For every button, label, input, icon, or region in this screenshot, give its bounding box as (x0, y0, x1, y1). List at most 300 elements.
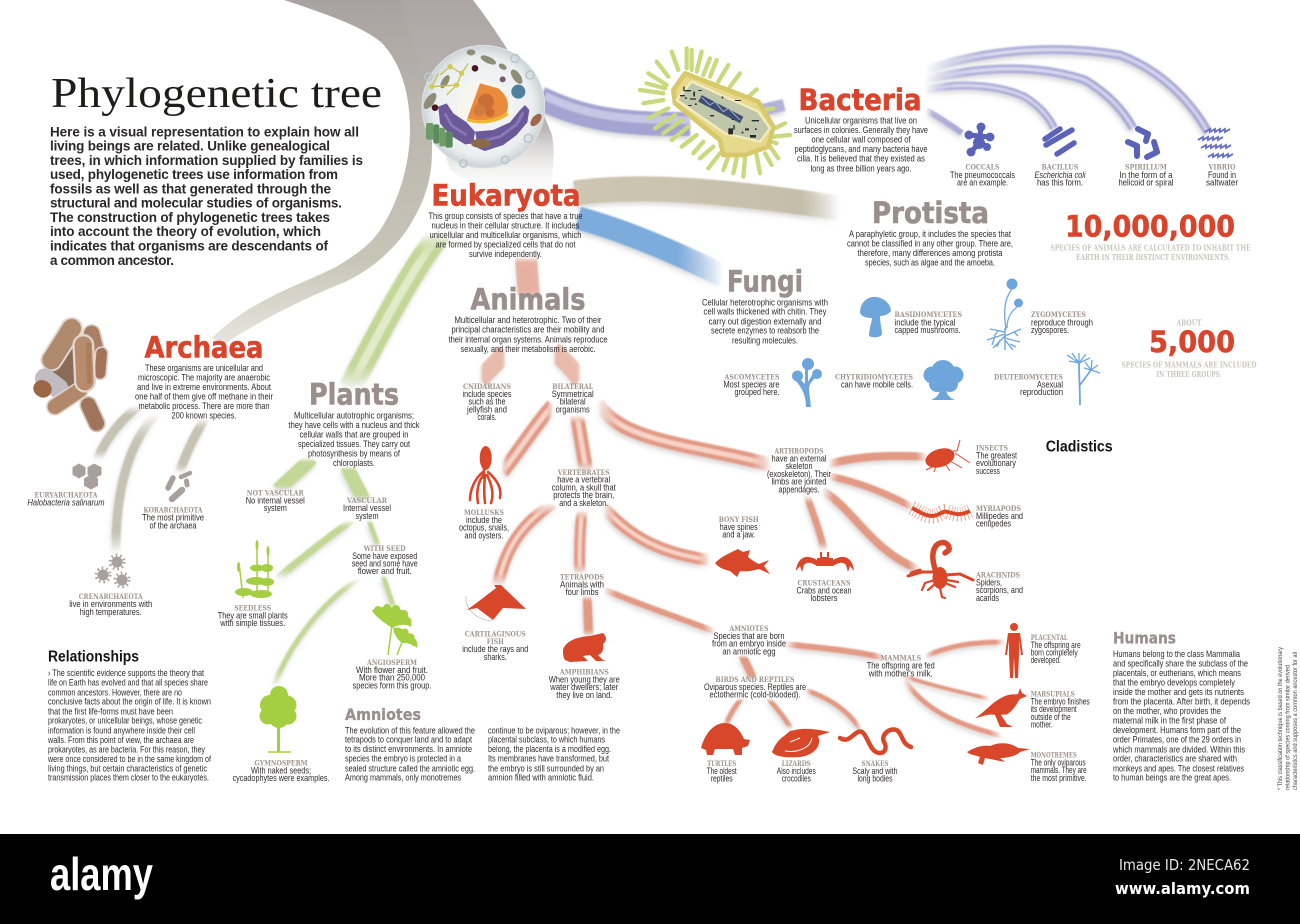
icon: seedless plant (235, 540, 274, 598)
fungi types: BASIDIOMYCETES (894, 310, 962, 319)
animal group labels: include the (466, 515, 502, 525)
animal group labels: LIZARDS (782, 759, 811, 768)
panel: relationships: living things, but certain characteristics of genetic (48, 763, 207, 774)
animal group labels: VERTEBRATES (557, 468, 610, 477)
icon: turtle (701, 723, 750, 755)
bacteria types: The pneumococcals (950, 170, 1015, 180)
animal group labels: (exoskeleton). Their (767, 469, 831, 479)
panel: plants: GYMNOSPERM (254, 758, 308, 768)
icon: euryarchaeota hexagons (72, 464, 102, 490)
panel: amniotes: the embryo is still surrounded by an (488, 763, 604, 774)
animal group labels: such as the (468, 397, 506, 407)
fungi types: Most species are (724, 380, 780, 390)
icon: deuteromycetes (1067, 353, 1100, 405)
icon: crocodile (772, 729, 830, 757)
footnote (1278, 647, 1299, 790)
footer image id (1115, 856, 1250, 898)
panel: humans: from the placenta. After birth, it depends (1113, 697, 1250, 708)
animal group labels: ectothermic (cold-blooded). (710, 690, 800, 700)
animal group labels: appendages. (778, 484, 820, 494)
bacteria types: Escherichia coli (1034, 170, 1086, 180)
panel: relationships: prokaryotes, as are bacteria. For this reason, they (48, 744, 205, 755)
bacteria types: BACILLUS (1042, 162, 1079, 172)
icon: spirillum (1128, 129, 1157, 157)
stat: five thousand mammal species (1122, 318, 1256, 379)
panel: bacteria: Unicellular organisms that live on (805, 116, 917, 127)
footnote: * This classification technique is based on the evolutionary (1278, 647, 1284, 790)
panel: bacteria (794, 83, 928, 174)
animal group labels: Crabs and ocean (796, 586, 852, 596)
animal group labels: success (976, 466, 1000, 476)
intro text: used, phylogenetic trees use information from (50, 167, 338, 182)
animal group labels: BONY FISH (719, 515, 759, 524)
branches: plants (274, 232, 441, 686)
panel: archaea: KORARCHAEOTA (144, 506, 203, 514)
animal group labels: MYRIAPODS (976, 504, 1021, 513)
icon: angiosperm (372, 604, 417, 655)
panel: amniotes: placental subclass, to which humans (488, 735, 605, 746)
panel: plants: cellular walls that are grouped in (300, 430, 408, 441)
panel: fungi: carry out digestion externally and (708, 316, 822, 327)
bacteria types: VIBRIO (1208, 162, 1236, 172)
panel: relationships: that the first life-forms must have been (48, 706, 173, 717)
animal group labels: BILATERAL (552, 382, 594, 391)
fungi types: grouped here. (734, 387, 780, 397)
panel: archaea: one half of them give off methane in their (135, 392, 274, 403)
animal group labels: column, a skull that (552, 482, 616, 492)
panel: archaea: 200 known species. (172, 410, 236, 421)
panel: amniotes: amnion filled with amniotic fluid. (488, 773, 594, 784)
animal group labels: FISH (487, 637, 504, 646)
panel: plants: they have cells with a nucleus and thick (288, 420, 420, 431)
icon: manta ray (466, 585, 526, 621)
bacteria types (950, 122, 1238, 188)
animal group labels: CNIDARIANS (463, 382, 511, 391)
icon: frog (563, 633, 606, 662)
animal group labels: crocodiles (782, 774, 811, 784)
intro text: living beings are related. Unlike genealogical (50, 139, 330, 154)
panel: plants: WITH SEED (363, 544, 406, 553)
panel: archaea: high temperatures. (80, 607, 142, 617)
panel: eukaryota: are formed by specialized cells that do not (436, 239, 576, 250)
animal group labels (459, 382, 1090, 784)
animal group labels: CRUSTACEANS (798, 578, 851, 588)
branches: animals (480, 256, 1005, 736)
illustration: archaea cells (42, 328, 102, 423)
panel: plants: flower and fruit. (358, 566, 412, 576)
icon: platypus (967, 743, 1030, 765)
animal group labels: the most primitive. (1031, 773, 1087, 783)
panel: protista: therefore, many differences among protista (858, 248, 1003, 259)
animal group labels: mother. (1031, 720, 1053, 730)
animal group labels: Also includes (777, 766, 816, 776)
panel: plants: With flower and fruit. (356, 665, 428, 675)
panel: plants: No internal vessel (246, 496, 305, 506)
icon: bony fish (715, 549, 770, 577)
panel: plants: photosynthesis by means of (308, 449, 400, 460)
stat: ten million animal species: EARTH IN THEIR DISTINCT ENVIRONMENTS. (1076, 252, 1230, 262)
panel: plants: system (264, 503, 287, 513)
icon: korarchaeota (168, 473, 190, 499)
panel: amniotes: continue to be oviparous; however, in the (488, 725, 620, 736)
animal group labels: its development (1031, 704, 1077, 714)
title: Phylogenetic tree (51, 71, 382, 117)
intro text (50, 124, 363, 268)
panel: fungi: Fungi (727, 265, 803, 299)
animal group labels: The only oviparous (1031, 758, 1086, 768)
panel: fungi: secrete enzymes to reabsorb the (711, 326, 819, 337)
animal group labels: SNAKES (862, 759, 889, 768)
panel: archaea: and live in extreme environments. About (137, 382, 271, 393)
animal group labels: lobsters (810, 593, 838, 603)
panel: relationships: walls. From this point of view, the archaea are (47, 735, 194, 746)
panel: archaea: of the archaea (150, 520, 197, 530)
fungi types: include the typical (894, 318, 956, 328)
animal group labels: protects the brain, (553, 490, 614, 500)
bacteria types: helicoid or spiral (1118, 178, 1174, 188)
branches: bacteria (540, 50, 1208, 133)
fungi types: zygospores. (1031, 325, 1069, 335)
panel: plants: More than 250,000 (359, 672, 425, 682)
panel: plants: system (356, 511, 378, 521)
animal group labels: AMPHIBIANS (559, 668, 609, 676)
animal group labels: Animals with (560, 580, 604, 590)
icon: mushroom (860, 297, 891, 337)
panel: plants: VASCULAR (346, 496, 387, 505)
panel: plants (218, 377, 432, 783)
panel: plants: specialized tissues. They carry out (298, 439, 410, 450)
footer bar (0, 834, 1300, 924)
fungi types: reproduction (1020, 387, 1063, 397)
panel: amniotes: The evolution of this feature allowed the (345, 725, 475, 736)
panel: humans: and specifically share the subclass of the (1113, 659, 1248, 670)
panel: humans: to human beings are the great apes. (1113, 773, 1231, 784)
animal group labels: jellyfish and (466, 404, 507, 414)
animal group labels: The offspring are (1031, 640, 1081, 650)
animal group labels: four limbs (566, 587, 599, 597)
bacteria types: In the form of a (1120, 170, 1173, 180)
animal group labels: corals. (478, 412, 496, 422)
animal group labels: The greatest (976, 450, 1017, 460)
panel: archaea: CRENARCHAEOTA (79, 592, 143, 601)
footnote: characteristics and supposes a common ancestor for all (1293, 652, 1299, 790)
fungi types: DEUTEROMYCETES (994, 372, 1063, 382)
panel: plants: Plants (309, 377, 399, 411)
icon: gymnosperm tree (260, 686, 296, 752)
animal group labels: ARACHNIDS (975, 570, 1020, 580)
panel: plants: SEEDLESS (234, 604, 271, 612)
animal group labels: AMNIOTES (729, 624, 769, 633)
panel: plants: They are small plants (218, 610, 288, 620)
icon: human (1005, 623, 1023, 678)
panel: amniotes: Amniotes (345, 705, 421, 724)
animal group labels: INSECTS (976, 444, 1008, 452)
panel: bacteria: one cellular wall composed of (812, 135, 911, 146)
animal group labels: and a jaw. (722, 530, 755, 540)
fungi types: ZYGOMYCETES (1031, 310, 1086, 319)
panel: humans: development. Humans form part of the (1113, 725, 1241, 736)
panel: plants: With naked seeds; (251, 766, 311, 776)
panel: bacteria: surfaces in colonies. Generally they have (794, 125, 928, 136)
animal group labels: and oysters. (464, 530, 504, 540)
animal group labels: limbs are jointed (772, 476, 826, 486)
bacteria types: has this form. (1037, 178, 1083, 188)
panel: humans (1112, 628, 1250, 784)
icon: bacillus (1045, 129, 1074, 154)
panel: archaea: The most primitive (142, 512, 204, 522)
footnote: relationship of species coming from similar derived (1286, 665, 1292, 790)
panel: humans: that the embryo develops completely (1113, 678, 1235, 689)
animal group labels: Oviparous species. Reptiles are (704, 682, 806, 692)
animal group labels: Millipedes and (976, 511, 1023, 521)
panel: plants: species form this group. (352, 680, 432, 690)
animal group labels: from an embryo inside (712, 638, 786, 648)
animal silhouettes (466, 440, 1030, 765)
panel: humans: on the mother, who provides the (1113, 706, 1221, 717)
intro text: The construction of phylogenetic trees takes (50, 210, 330, 225)
panel: protista (847, 196, 1013, 268)
animal group labels: TURTLES (707, 759, 736, 768)
animal group labels: PLACENTAL (1031, 633, 1068, 642)
panel: eukaryota: This group consists of species that have a true (428, 211, 582, 222)
panel: humans: Humans belong to the class Mammalia (1113, 649, 1241, 660)
panel: archaea: metabolic process. There are more than (138, 401, 270, 412)
animal group labels: ARTHROPODS (774, 446, 824, 456)
fungi types: Asexual (1037, 380, 1063, 390)
panel: plants: Internal vessel (343, 503, 391, 513)
panel: humans: Humans (1113, 628, 1176, 647)
panel: amniotes: tetrapods to conquer land and to adapt (345, 735, 472, 746)
footer logo: alamy (50, 848, 153, 900)
animal group labels: octopus, snails, (459, 523, 509, 533)
panel: relationships: common ancestors. However, there are no (48, 687, 182, 698)
icon: chytridiomycetes (924, 360, 964, 400)
panel: humans: which mammals are divided. Within this (1112, 744, 1245, 755)
animal group labels: MARSUPIALS (1031, 690, 1075, 698)
icon: myriapod (912, 508, 970, 516)
branches: archaea (98, 405, 205, 552)
intro text: into account the theory of evolution, which (50, 224, 321, 239)
panel: protista: cannot be classified in any other group. There are, (847, 238, 1013, 250)
icon: ascomycetes (792, 358, 822, 407)
panel: animals heading: Multicellular and heterotrophic. Two of their (454, 315, 602, 326)
fungi types: can have mobile cells. (841, 380, 913, 390)
icon: beetle (923, 440, 970, 472)
panel: relationships: prokaryotes, or unicellular beings, whose genetic (48, 716, 202, 727)
phylogenetic tree trunk (212, 0, 554, 345)
fungi types: CHYTRIDIOMYCETES (835, 372, 913, 382)
fungi types: reproduce through (1031, 318, 1093, 328)
panel: eukaryota: Eukaryota (432, 179, 580, 213)
panel: amniotes (345, 705, 620, 784)
footer image id: Image ID: 2NECA62 (1119, 856, 1250, 874)
panel: relationships: › The scientific evidence supports the theory that (48, 668, 204, 679)
animal group labels: skeleton (786, 461, 812, 471)
panel: plants: cycadophytes were examples. (232, 773, 330, 783)
icon: octopus (470, 446, 500, 503)
animal group labels: acarids (976, 593, 999, 603)
panel: eukaryota: unicellular and multicellular organisms, which (430, 230, 582, 241)
icon: coccals (964, 122, 994, 156)
intro text: Here is a visual representation to explain how all (50, 124, 359, 140)
panel: plants: Some have exposed (352, 551, 417, 561)
animal group labels: evolutionary (976, 458, 1016, 468)
animal group labels: mammals. They are (1031, 765, 1087, 775)
panel: fungi: cell walls thickened with chitin. They (704, 307, 827, 318)
panel: animals heading: their internal organ systems. Animals reproduce (448, 334, 608, 345)
panel: protista: A paraphyletic group, it includes the species that (849, 229, 1011, 240)
panel: bacteria: Bacteria (798, 83, 922, 117)
animal group labels: organisms (556, 404, 590, 414)
animal group labels: Spiders, (976, 578, 1002, 588)
animal group labels: bilateral (560, 397, 586, 407)
panel: humans: monkeys and apes. The closest relatives (1113, 763, 1244, 774)
animal group labels: MOLLUSKS (464, 508, 504, 517)
icon: zygomycetes (987, 278, 1023, 350)
panel: amniotes: Among mammals, only monotremes (345, 773, 461, 784)
animal group labels: The offspring are fed (867, 660, 935, 670)
animal group labels: CARTILAGINOUS (465, 630, 526, 638)
panel: plants: with simple tissues. (219, 618, 285, 628)
panel: plants: NOT VASCULAR (247, 488, 304, 498)
animal group labels: Species that are born (714, 631, 784, 641)
icon: snake (840, 729, 911, 753)
panel: plants: seed and some have (352, 558, 418, 568)
animal group labels: with mother's milk. (868, 668, 933, 678)
icon: kangaroo (975, 688, 1027, 727)
stat: five thousand mammal species: ABOUT (1176, 318, 1202, 328)
bacteria types: SPIRILLUM (1125, 162, 1167, 172)
fungi types: capped mushrooms. (894, 325, 960, 335)
animal group labels: an amniotic egg (722, 646, 776, 656)
panel: bacteria: peptidoglycans, and many bacteria have (794, 144, 928, 155)
stat: ten million animal species: 10,000,000 (1065, 210, 1235, 244)
panel: amniotes: belong, the placenta is a modified egg. (488, 744, 611, 755)
animal group labels: include the rays and (462, 644, 528, 654)
animal group labels: Scaly and with (852, 766, 898, 776)
panel: amniotes: to its distinct environments. In amniote (345, 744, 472, 755)
icon: vibrio (1198, 129, 1233, 157)
branches: protista and fungi (575, 189, 840, 276)
bacteria types: COCCALS (966, 162, 1000, 172)
panel: protista: species, such as algae and the amoeba. (865, 258, 995, 268)
panel: humans: maternal milk in the first phase of (1113, 716, 1226, 727)
panel: amniotes: species the embryo is protected in a (345, 754, 461, 765)
animal group labels: long bodies (858, 774, 893, 784)
panel: fungi: resulting molecules. (732, 335, 798, 346)
animal group labels: TETRAPODS (560, 572, 604, 582)
animal group labels: sharks. (484, 652, 507, 662)
panel: humans: order, characteristics are shared with (1113, 754, 1237, 765)
animal group labels: born completely (1031, 648, 1078, 658)
panel: relationships: conclusive facts about the origin of life. It is known (48, 697, 211, 708)
panel: protista: Protista (872, 196, 989, 230)
panel: archaea: Halobacteria salinarum (28, 498, 105, 508)
illustration: bacterium (640, 48, 790, 177)
panel: archaea: These organisms are unicellular and (145, 363, 263, 374)
animal group labels: water dwellers; later (549, 682, 618, 692)
panel: plants: chloroplasts. (333, 458, 375, 469)
animal group labels: centipedes (976, 519, 1011, 529)
bacteria types: saltwater (1206, 178, 1238, 188)
panel: amniotes: sealed structure called the amniotic egg. (345, 763, 475, 774)
panel: animals heading: Animals (470, 282, 586, 316)
panel: amniotes: Its membranes have transformed, but (488, 754, 609, 765)
panel: relationships: information is found anywhere inside their cell (48, 725, 195, 736)
panel: animals heading: principal characteristics are their mobility and (452, 325, 604, 336)
animal group labels: Symmetrical (552, 389, 594, 399)
panel: archaea: Archaea (144, 330, 264, 364)
heading: cladistics: Cladistics (1046, 439, 1113, 456)
animal group labels: MAMMALS (880, 654, 922, 662)
animal group labels: outside of the (1031, 712, 1071, 722)
animal group labels: have spines (720, 522, 758, 532)
animal group labels: scorpions, and (976, 585, 1023, 595)
animal group labels: include species (462, 389, 512, 399)
animal group labels: The embryo finishes (1031, 696, 1090, 706)
stat: five thousand mammal species: IN THREE GROUPS. (1156, 369, 1222, 379)
panel: archaea: live in environments with (69, 599, 152, 609)
footer image id: www.alamy.com (1115, 879, 1250, 898)
fungi types: ASCOMYCETES (724, 372, 780, 382)
panel: archaea: microscopic. The majority are anaerobic (138, 372, 270, 383)
panel: relationships (47, 649, 211, 784)
panel: fungi: Cellular heterotrophic organisms with (702, 297, 828, 308)
panel: fungi (702, 265, 828, 346)
icon: scorpion (908, 543, 973, 598)
panel: relationships: Relationships (48, 649, 139, 666)
animal group labels: The oldest (707, 766, 737, 776)
icon: crenarchaeota (96, 555, 129, 587)
intro text: a common ancestor. (50, 253, 174, 268)
animal group labels: have an external (772, 454, 826, 464)
fungi types (724, 278, 1100, 407)
panel: humans: inside the mother and gets its nutrients (1113, 687, 1244, 698)
panel: animals heading: sexually, and their metabolism is aerobic. (460, 344, 596, 355)
animal group labels: have a vertebral (557, 475, 610, 485)
stat: five thousand mammal species: 5,000 (1149, 325, 1235, 359)
intro text: trees, in which information supplied by families is (50, 153, 363, 168)
panel: bacteria: long as three billion years ago. (810, 163, 912, 174)
bacteria types: are an example. (957, 178, 1008, 188)
bacteria types: Found in (1208, 170, 1236, 180)
stat: ten million animal species (1050, 210, 1250, 262)
panel: archaea: EURYARCHAEOTA (34, 490, 98, 500)
intro text: structural and molecular studies of organisms. (50, 196, 342, 211)
animal group labels: they live on land. (556, 690, 612, 700)
panel: bacteria: cilia. It is believed that they existed as (797, 154, 925, 165)
panel: eukaryota: nucleus in their cellular structure. It includes (432, 220, 580, 231)
panel: humans: placentals, or eutherians, which means (1113, 668, 1241, 679)
animal group labels: MONOTREMES (1031, 750, 1077, 760)
panel: eukaryota: survive independently. (469, 249, 542, 260)
animal group labels: When young they are (549, 674, 620, 684)
icon: crab (796, 552, 854, 572)
intro text: indicates that organisms are descendants of (50, 238, 328, 254)
animal group labels: developed. (1031, 655, 1061, 665)
panel: eukaryota (428, 179, 582, 260)
panel: archaea (28, 330, 274, 617)
panel: relationships: were once considered to be in the same kingdom of (47, 754, 211, 765)
panel: humans: order Primates, one of the 29 orders in (1113, 735, 1241, 746)
animal group labels: BIRDS AND REPTILES (716, 675, 795, 684)
panel: plants: Multicellular autotrophic organisms; (294, 410, 414, 421)
illustration: eukaryotic cell (421, 45, 545, 168)
panel: relationships: life on Earth has evolved and that all species share (48, 678, 208, 689)
animal group labels: and a skeleton. (559, 498, 608, 508)
intro text: fossils as well as that generated through the (50, 182, 331, 196)
panel: animals heading (448, 282, 608, 355)
